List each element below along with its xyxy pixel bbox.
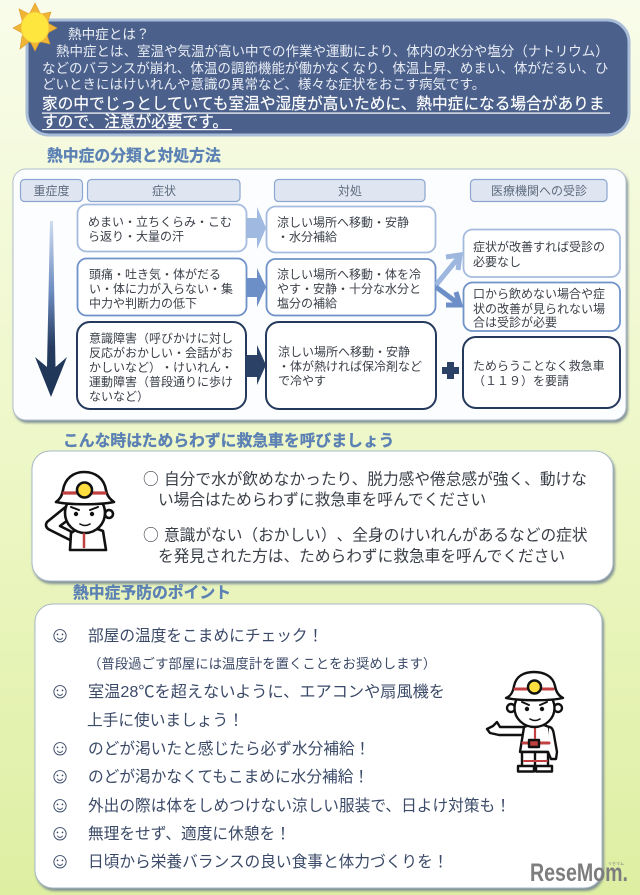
treatment box: severe	[266, 322, 436, 409]
text block: first condition: い場合はためらわずに救急車を呼んでください	[158, 491, 486, 509]
list: prevention tips: のどが渇いたと感じたら必ず水分補給！	[88, 740, 370, 758]
text block: underlined warning: すので、注意が必要です。	[42, 113, 228, 131]
treatment box: severe: 涼しい場所へ移動・安静	[278, 345, 410, 359]
header: medical visit	[470, 180, 607, 202]
text block: explanation: 熱中症とは、室温や気温が高い中での作業や運動により、体内の水分や塩分（ナトリウム）	[56, 43, 609, 59]
arrow: to no visit needed	[436, 255, 460, 285]
treatment box: moderate	[266, 259, 436, 316]
text block: first condition: 自分で水が飲めなかったり、脱力感や倦怠感が強く、動けな	[164, 470, 587, 488]
icon: sun	[13, 3, 57, 51]
list: prevention tips: 室温28℃を超えないように、エアコンや扇風機を	[88, 683, 445, 701]
heading: prevention points: 熱中症予防のポイント	[73, 584, 231, 602]
list: smiley icons: ☺	[49, 735, 71, 760]
list: smiley icons	[49, 622, 71, 873]
panel: prevention points	[35, 604, 602, 888]
text block: explanation: などのバランスが崩れ、体温の調節機能が働かなくなり、体温上昇、めまい、体がだるい、ひ	[42, 60, 608, 76]
symptom box: severe: 意識障害（呼びかけに対し	[89, 332, 233, 346]
list: prevention tips: 部屋の温度をこまめにチェック！	[88, 627, 323, 645]
treatment box: mild: 涼しい場所へ移動・安静	[277, 216, 409, 230]
visit box: needed	[464, 282, 620, 331]
text block: underlined warning	[42, 95, 610, 131]
treatment box: mild: ・水分補給	[277, 230, 337, 244]
panel: when to call	[32, 451, 613, 581]
list: prevention tips: 上手に使いましょう！	[87, 712, 244, 730]
list: prevention tips: 外出の際は体をしめつけない涼しい服装で、日よけ対策も！	[88, 797, 511, 815]
visit box: needed: 合は受診が必要	[473, 314, 557, 330]
symptom box: mild	[78, 204, 246, 252]
header: severity: 重症度	[33, 184, 70, 198]
text block: explanation: どいときにはけいれんや意識の異常など、様々な症状をおこす病気です。	[42, 77, 485, 92]
icon: pointing firefighter	[487, 672, 563, 772]
symptom box: moderate: 頭痛・吐き気・体がだる	[89, 266, 221, 282]
symptom box: moderate: 中力や判断力の低下	[89, 296, 197, 310]
text block: second condition: 意識がない（おかしい）、全身のけいれんがあるなどの症状	[164, 526, 588, 544]
symptom box: moderate	[78, 258, 246, 316]
header: severity	[20, 180, 82, 202]
list: prevention tips: のどが渇かなくてもこまめに水分補給！	[88, 768, 369, 786]
treatment box: moderate: 涼しい場所へ移動・体を冷	[277, 268, 421, 282]
visit box: ambulance	[463, 337, 620, 408]
visit box: not needed: 必要なし	[473, 255, 521, 269]
visit box: ambulance: ためらうことなく救急車	[473, 358, 605, 373]
arrow: moderate to treatment	[247, 268, 266, 307]
list: prevention tips	[87, 627, 511, 871]
header: symptoms: 症状	[152, 184, 176, 198]
treatment box: mild	[266, 206, 436, 252]
panel: classification table	[13, 169, 626, 420]
text block: second condition: を発見された方は、ためらわずに救急車を呼んでください	[158, 548, 565, 566]
icon: plus	[442, 362, 459, 379]
heading: classification and treatment: 熱中症の分類と対処方法	[47, 146, 221, 165]
arrow: severe to treatment	[246, 345, 266, 385]
list: smiley icons: ☺	[49, 820, 71, 845]
symptom box: severe	[77, 322, 246, 409]
icon: saluting firefighter	[46, 472, 114, 550]
heading: what is heatstroke: 熱中症とは？	[68, 27, 150, 42]
symptom box: moderate: い・体に力が入らない・集	[89, 281, 233, 296]
visit box: needed: 状の改善が見られない場	[473, 301, 605, 316]
symptom box: severe: かしいなど）・けいれん・	[89, 360, 233, 374]
list: prevention tips: （普段過ごす部屋には温度計を置くことをお奨めします）	[88, 656, 436, 672]
text block: first condition	[143, 466, 587, 509]
symptom box: mild: めまい・立ちくらみ・こむ	[88, 215, 232, 229]
treatment box: severe: で冷やす	[278, 374, 326, 388]
header: treatment: 対処	[338, 184, 362, 198]
header: symptoms	[88, 180, 240, 202]
text block: second condition	[143, 522, 588, 566]
symptom box: severe: 運動障害（普段通りに歩け	[89, 374, 233, 389]
visit box: needed: 口から飲めない場合や症	[473, 286, 605, 301]
visit box: not needed	[464, 230, 620, 277]
text block: underlined warning: 家の中でじっとしていても室温や湿度が高いために、熱中症になる場合がありま	[42, 95, 605, 113]
text block: second condition: ○	[143, 522, 159, 546]
list: prevention tips: 日頃から栄養バランスの良い食事と体力づくりを！	[88, 853, 448, 871]
treatment box: moderate: やす・安静・十分な水分と	[277, 282, 421, 296]
list: smiley icons: ☺	[49, 678, 71, 703]
visit box: not needed: 症状が改善すれば受診の	[473, 239, 605, 254]
panel: what is heatstroke	[27, 20, 629, 135]
arrow: mild to treatment	[247, 207, 266, 249]
symptom box: severe: ないなど）	[89, 390, 149, 404]
heading: call an ambulance: こんな時はためらわずに救急車を呼びましょう	[63, 432, 394, 450]
symptom box: severe: 反応がおかしい・会話がお	[89, 345, 233, 360]
treatment box: severe: ・体が熱ければ保冷剤など	[278, 358, 422, 374]
list: smiley icons: ☺	[49, 848, 71, 873]
header: medical visit: 医療機関への受診	[491, 183, 587, 198]
symptom box: mild: ら返り・大量の汗	[88, 230, 184, 244]
list: smiley icons: ☺	[49, 763, 71, 788]
list: smiley icons: ☺	[49, 622, 71, 647]
text block: explanation	[42, 43, 609, 92]
header: treatment	[274, 180, 425, 202]
text block: first condition: ○	[143, 466, 159, 490]
arrow: severity gradient	[35, 221, 67, 397]
treatment box: moderate: 塩分の補給	[277, 296, 337, 310]
logo: ReseMom: リセマム	[608, 861, 624, 866]
visit box: ambulance: （１１９）を要請	[473, 374, 569, 388]
list: smiley icons: ☺	[49, 792, 71, 817]
arrow: to visit needed	[436, 287, 460, 305]
list: prevention tips: 無理をせず、適度に休憩を！	[88, 825, 291, 843]
